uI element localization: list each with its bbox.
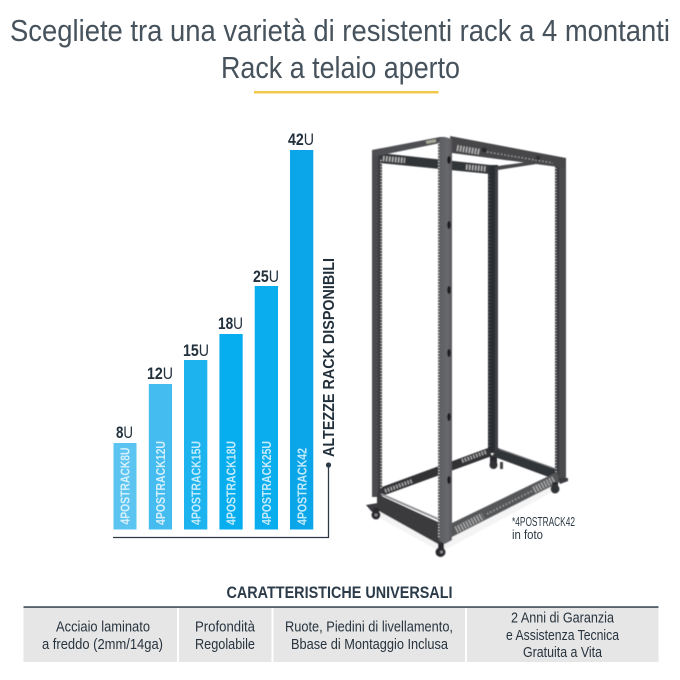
right post: [555, 158, 566, 482]
front post: [438, 137, 452, 544]
cell: steel: Acciaio laminato: [56, 620, 150, 636]
bar: 18U: 4POSTRACK18U: [224, 441, 239, 525]
post slots: [447, 156, 451, 484]
section heading: CARATTERISTICHE UNIVERSALI: [226, 584, 452, 602]
cell: depth: Profondità: [195, 620, 256, 636]
bar: 42U: 4POSTRACK42: [294, 448, 309, 525]
bar: 25U: [253, 268, 279, 530]
cell: depth: Regolabile: [195, 637, 255, 653]
back top beams: [380, 153, 556, 174]
title: [10, 13, 670, 85]
axis line with dot: [113, 462, 331, 538]
title: Rack a telaio aperto: [221, 50, 460, 85]
table rule: [24, 606, 658, 608]
casters: [372, 482, 560, 557]
photo: open-frame 4-post rack: [366, 136, 568, 557]
top side beams: [372, 136, 566, 168]
photo note: *4POSTRACK42: [512, 515, 575, 529]
bar: 42U: [288, 131, 314, 530]
title underline: [254, 91, 438, 94]
bar: 8U: [114, 424, 136, 530]
bar: 12U: 12U: [147, 365, 173, 383]
bar: 18U: 18U: [218, 315, 243, 333]
bar: 15U: 15U: [183, 342, 209, 360]
photo note: [512, 515, 575, 542]
bar: 18U: [218, 315, 243, 530]
back post: [488, 165, 498, 453]
bar: 8U: 4POSTRACK8U: [118, 448, 132, 524]
bar: 15U: 4POSTRACK15U: [188, 441, 203, 525]
photo note: in foto: [512, 528, 543, 542]
features table: [24, 606, 658, 662]
cell: casters and feet: [274, 608, 465, 662]
bar chart: available rack heights: [114, 131, 314, 530]
bar: 42U: 42U: [288, 131, 314, 149]
axis label: ALTEZZE RACK DISPONIBILI: [321, 258, 338, 457]
brand mark: [426, 139, 436, 144]
bar: 25U: 4POSTRACK25U: [259, 441, 274, 525]
bar: 8U: 8U: [116, 424, 133, 442]
left post: [372, 151, 382, 497]
cell: casters and feet: Bbase di Montaggio Inclusa: [291, 637, 449, 653]
foot plates: [366, 478, 568, 545]
cell: steel: a freddo (2mm/14ga): [42, 637, 163, 653]
bottom front beams: [377, 472, 560, 544]
bar: 25U: 25U: [253, 268, 279, 286]
bar: 12U: [147, 365, 173, 530]
back caster: [490, 456, 503, 469]
cell: depth: [179, 608, 272, 662]
cell: casters and feet: Ruote, Piedini di livellamento,: [285, 620, 453, 636]
cell: warranty: [467, 608, 658, 662]
bottom back beams: [382, 448, 557, 496]
bar: 12U: 4POSTRACK12U: [153, 441, 168, 525]
cell: warranty: e Assistenza Tecnica: [506, 628, 620, 644]
bar: 15U: [183, 342, 209, 530]
cell: steel: [24, 608, 177, 662]
cell: warranty: Gratuita a Vita: [523, 645, 603, 661]
floor shadow: [376, 482, 560, 552]
cell: warranty: 2 Anni di Garanzia: [511, 611, 615, 627]
